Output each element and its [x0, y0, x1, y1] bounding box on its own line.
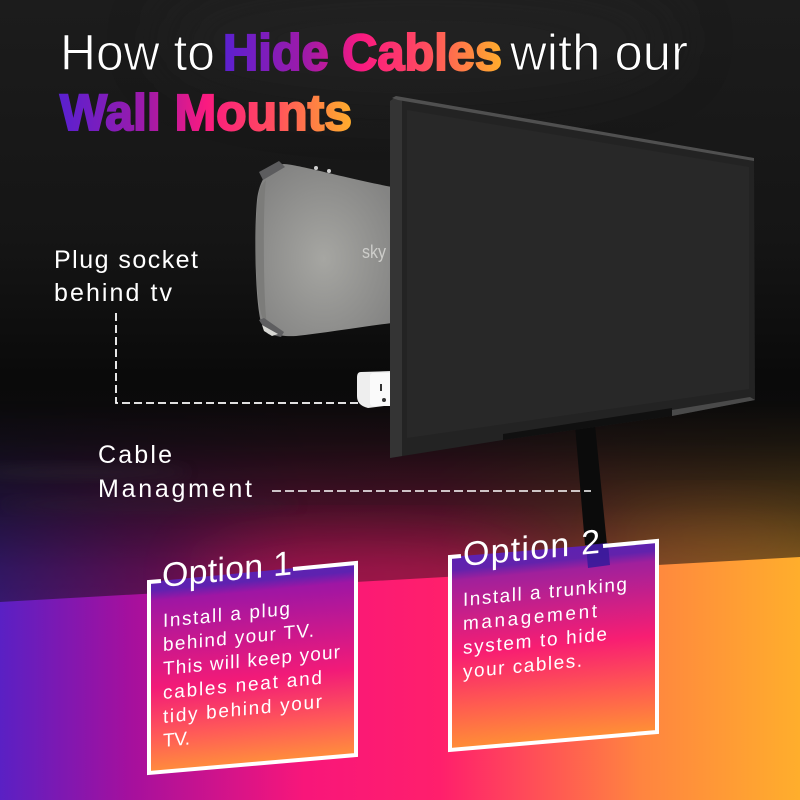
title: Hide Cables: [223, 24, 502, 81]
option 1 body text: This will keep your: [163, 642, 341, 680]
router logo: sky: [362, 242, 386, 262]
title: with our: [509, 24, 688, 81]
option 2 body text: management: [463, 601, 598, 635]
panel: option 1: [148, 545, 357, 774]
arrow: dashed leader to cable cover: [272, 490, 591, 492]
option 1 heading: Option 1: [162, 545, 292, 595]
option 2 body text: your cables.: [463, 651, 582, 683]
callout: cable management label: Managment: [98, 475, 252, 503]
option 1 body text: tidy behind your: [163, 692, 323, 728]
trunking cable cover: [575, 425, 607, 545]
panel: option 2: [449, 523, 658, 751]
callout: plug socket label: [54, 246, 198, 307]
title: How to: [60, 24, 215, 81]
icon: sky router: [255, 161, 392, 337]
option 1 body text: TV.: [163, 728, 190, 752]
callout: plug socket label: behind tv: [54, 279, 172, 307]
callout: cable management label: [98, 441, 252, 503]
option 1 body text: cables neat and: [163, 668, 322, 704]
icon: wall plug socket: [357, 371, 394, 408]
callout: plug socket label: Plug socket: [54, 246, 198, 274]
title: [60, 24, 688, 141]
colour floor: [0, 557, 800, 800]
option 1 body text: Install a plug: [163, 599, 290, 632]
option 1 body text: behind your TV.: [163, 620, 314, 656]
option 2 heading: Option 2: [463, 523, 600, 574]
callout: cable management label: Cable: [98, 441, 172, 469]
title: Wall Mounts: [60, 84, 352, 141]
option 2 body text: Install a trunking: [463, 574, 627, 611]
option 2 body text: system to hide: [463, 624, 607, 659]
option 2 body text: [463, 574, 627, 683]
television: [390, 96, 755, 458]
arrow: dashed leader to plug socket: [116, 313, 358, 403]
option 1 body text: [163, 594, 341, 752]
